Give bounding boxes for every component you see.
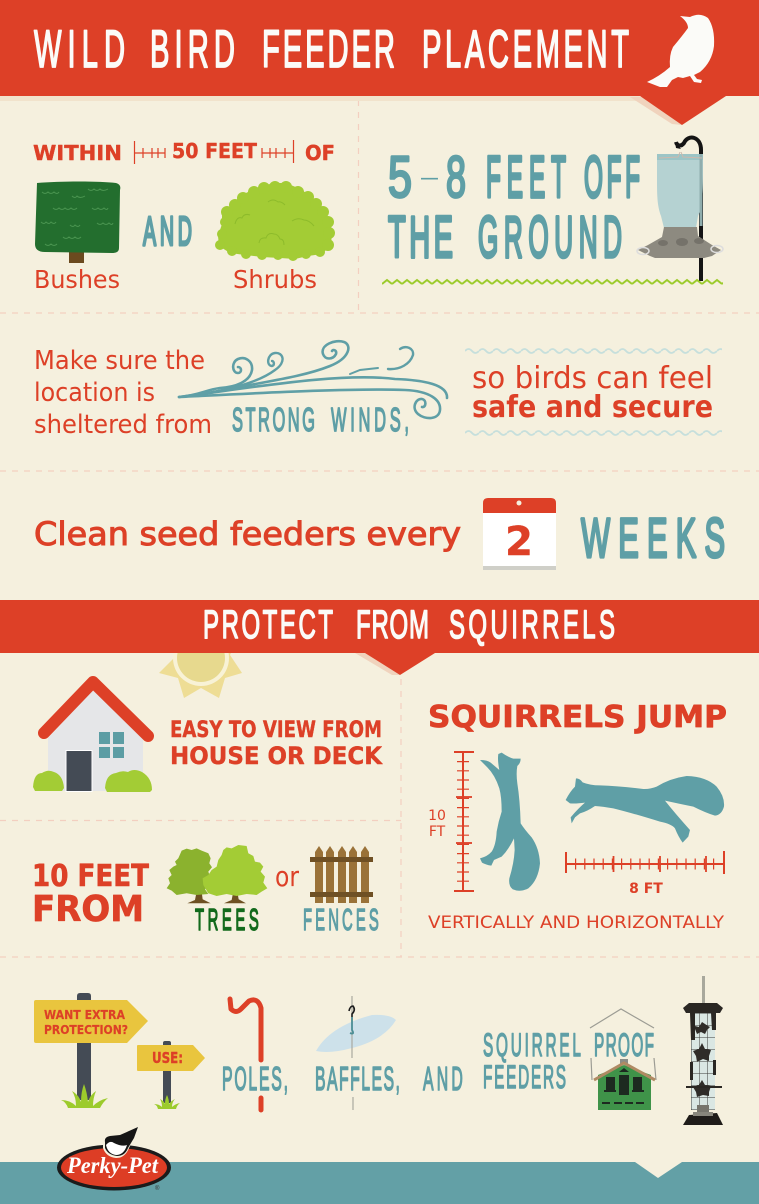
- heading: 5-8 feet off the ground: –: [421, 164, 439, 191]
- header banner: [0, 0, 759, 125]
- text: make sure the location: sheltered from: [34, 410, 212, 440]
- panel: distance from bushes and shrubs: [33, 139, 335, 294]
- panel: sheltered from strong winds: [34, 341, 722, 440]
- text: strong winds: STRONG: [232, 401, 315, 439]
- sign text: [44, 1008, 128, 1037]
- icon: red pole: [230, 999, 261, 1110]
- icon: calendar: [483, 498, 556, 570]
- text: 10 feet from: 10 FEET: [32, 859, 149, 894]
- icon: large signpost: [34, 993, 148, 1108]
- panel: ten feet from trees or fences: [32, 845, 379, 938]
- label: 10 ft: [428, 808, 446, 840]
- dashed section dividers: [0, 100, 759, 957]
- panel: clean feeders: [34, 498, 725, 570]
- title: WILD: [34, 20, 125, 79]
- icon: vertical squirrel: [480, 753, 540, 891]
- heading: within 50 feet of: 50 FEET: [172, 139, 257, 163]
- text: 10 feet from: FROM: [32, 889, 144, 930]
- icon: horizontal squirrel: [566, 776, 724, 843]
- icon: small signpost: [137, 1041, 205, 1109]
- registered mark: ®: [155, 1185, 160, 1192]
- sign text: WANT EXTRA: [44, 1008, 126, 1022]
- label: shrubs: Shrubs: [233, 265, 317, 294]
- banner: protect from squirrels: [0, 600, 759, 675]
- text: so birds can feel safe and secure: so birds can feel: [472, 361, 713, 396]
- calendar number: 2: [505, 519, 533, 565]
- logo bird: [103, 1127, 138, 1158]
- icon: baffle: [316, 996, 396, 1110]
- label: squirrel proof feeders: PROOF: [594, 1028, 654, 1064]
- label: 10 ft: 10: [428, 808, 446, 824]
- text: easy to view from house or deck: HOUSE OR DECK: [170, 742, 383, 770]
- label: baffles and: BAFFLES,: [315, 1062, 400, 1098]
- word: or: or: [275, 860, 299, 893]
- icon: trees: [167, 845, 267, 903]
- word: weeks: WEEKS: [581, 506, 725, 569]
- title: BIRD: [150, 20, 235, 79]
- icon: shrub: [215, 181, 335, 261]
- panel: squirrels jump: [428, 700, 727, 933]
- label: poles: POLES,: [222, 1062, 288, 1098]
- text: strong winds: [232, 401, 409, 439]
- decorative wave bottom: [465, 428, 722, 438]
- icon: green house feeder: [590, 1009, 656, 1110]
- text: easy to view from house or deck: EASY TO VIEW FROM: [170, 718, 382, 743]
- logo wordmark: Perky-Pet: [66, 1153, 159, 1178]
- panel: extra protection: [34, 976, 723, 1125]
- label: squirrel proof feeders: [483, 1028, 654, 1096]
- horizontal ruler 8 ft: [566, 851, 724, 874]
- label: 8 ft: 8 FT: [629, 881, 663, 897]
- label: trees: TREES: [195, 903, 259, 938]
- text: clean seed feeders every: Clean seed feeders every: [34, 515, 461, 553]
- section heading: SQUIRRELS: [449, 602, 615, 646]
- text: easy to view from house or deck: [170, 718, 383, 770]
- icon: wind swirls: [179, 341, 447, 418]
- label: squirrel proof feeders: SQUIRREL: [483, 1028, 581, 1064]
- section heading: FROM: [356, 602, 429, 646]
- label: baffles and: [315, 1062, 463, 1098]
- text: make sure the location: location is: [34, 378, 155, 408]
- icon: bush: [35, 182, 120, 263]
- title: PLACEMENT: [422, 20, 629, 79]
- heading: within 50 feet of: WITHIN: [33, 141, 122, 165]
- label: fences: FENCES: [303, 903, 379, 938]
- label: squirrel proof feeders: FEEDERS: [483, 1060, 566, 1096]
- text: vertically and horizontally: VERTICALLY AND HORIZONTALLY: [428, 913, 725, 933]
- icon: sun: [159, 653, 242, 698]
- title: [34, 20, 629, 79]
- section heading: PROTECT: [203, 602, 333, 646]
- heading: 5-8 feet off the ground: 8: [446, 145, 466, 210]
- heading: within 50 feet of: OF: [305, 141, 335, 165]
- heading: 5-8 feet off the ground: FEET: [486, 146, 566, 210]
- icon: fence: [310, 846, 373, 903]
- label: bushes: Bushes: [34, 265, 120, 294]
- text: so birds can feel safe and secure: [472, 361, 713, 425]
- heading: within 50 feet of: [33, 139, 335, 165]
- text: so birds can feel safe and secure: safe and secure: [472, 390, 713, 425]
- text: 10 feet from: [32, 859, 149, 930]
- ground zigzag line: [382, 278, 723, 287]
- label: baffles and: AND: [423, 1062, 463, 1098]
- title: FEEDER: [262, 20, 395, 79]
- heading: 5-8 feet off the ground: [388, 145, 640, 270]
- sign text: PROTECTION?: [44, 1023, 128, 1037]
- label: 10 ft: FT: [429, 824, 446, 840]
- logo: Perky-Pet: [57, 1127, 171, 1192]
- heading: 5-8 feet off the ground: THE: [388, 204, 453, 270]
- heading: 5-8 feet off the ground: GROUND: [478, 204, 622, 270]
- heading: 5-8 feet off the ground: OFF: [584, 146, 640, 210]
- panel: feeder height: [382, 138, 723, 287]
- text: strong winds: WINDS,: [331, 401, 409, 439]
- heading: squirrels jump: SQUIRRELS JUMP: [428, 700, 727, 735]
- text: make sure the location: [34, 346, 212, 440]
- word: and: AND: [143, 208, 192, 254]
- vertical ruler 10 ft: [454, 752, 474, 892]
- text: make sure the location: Make sure the: [34, 346, 205, 376]
- icon: white bird: [647, 15, 714, 87]
- panel: view from house: [33, 682, 383, 792]
- icon: house: [33, 682, 152, 792]
- footer band: [0, 1162, 759, 1204]
- icon: tube feeder: [683, 976, 723, 1125]
- section heading: [203, 602, 615, 646]
- sign text: use: USE:: [152, 1049, 183, 1067]
- heading: 5-8 feet off the ground: 5: [388, 145, 412, 210]
- decorative wave top: [465, 346, 722, 356]
- icon: hummingbird feeder on pole: [637, 138, 723, 281]
